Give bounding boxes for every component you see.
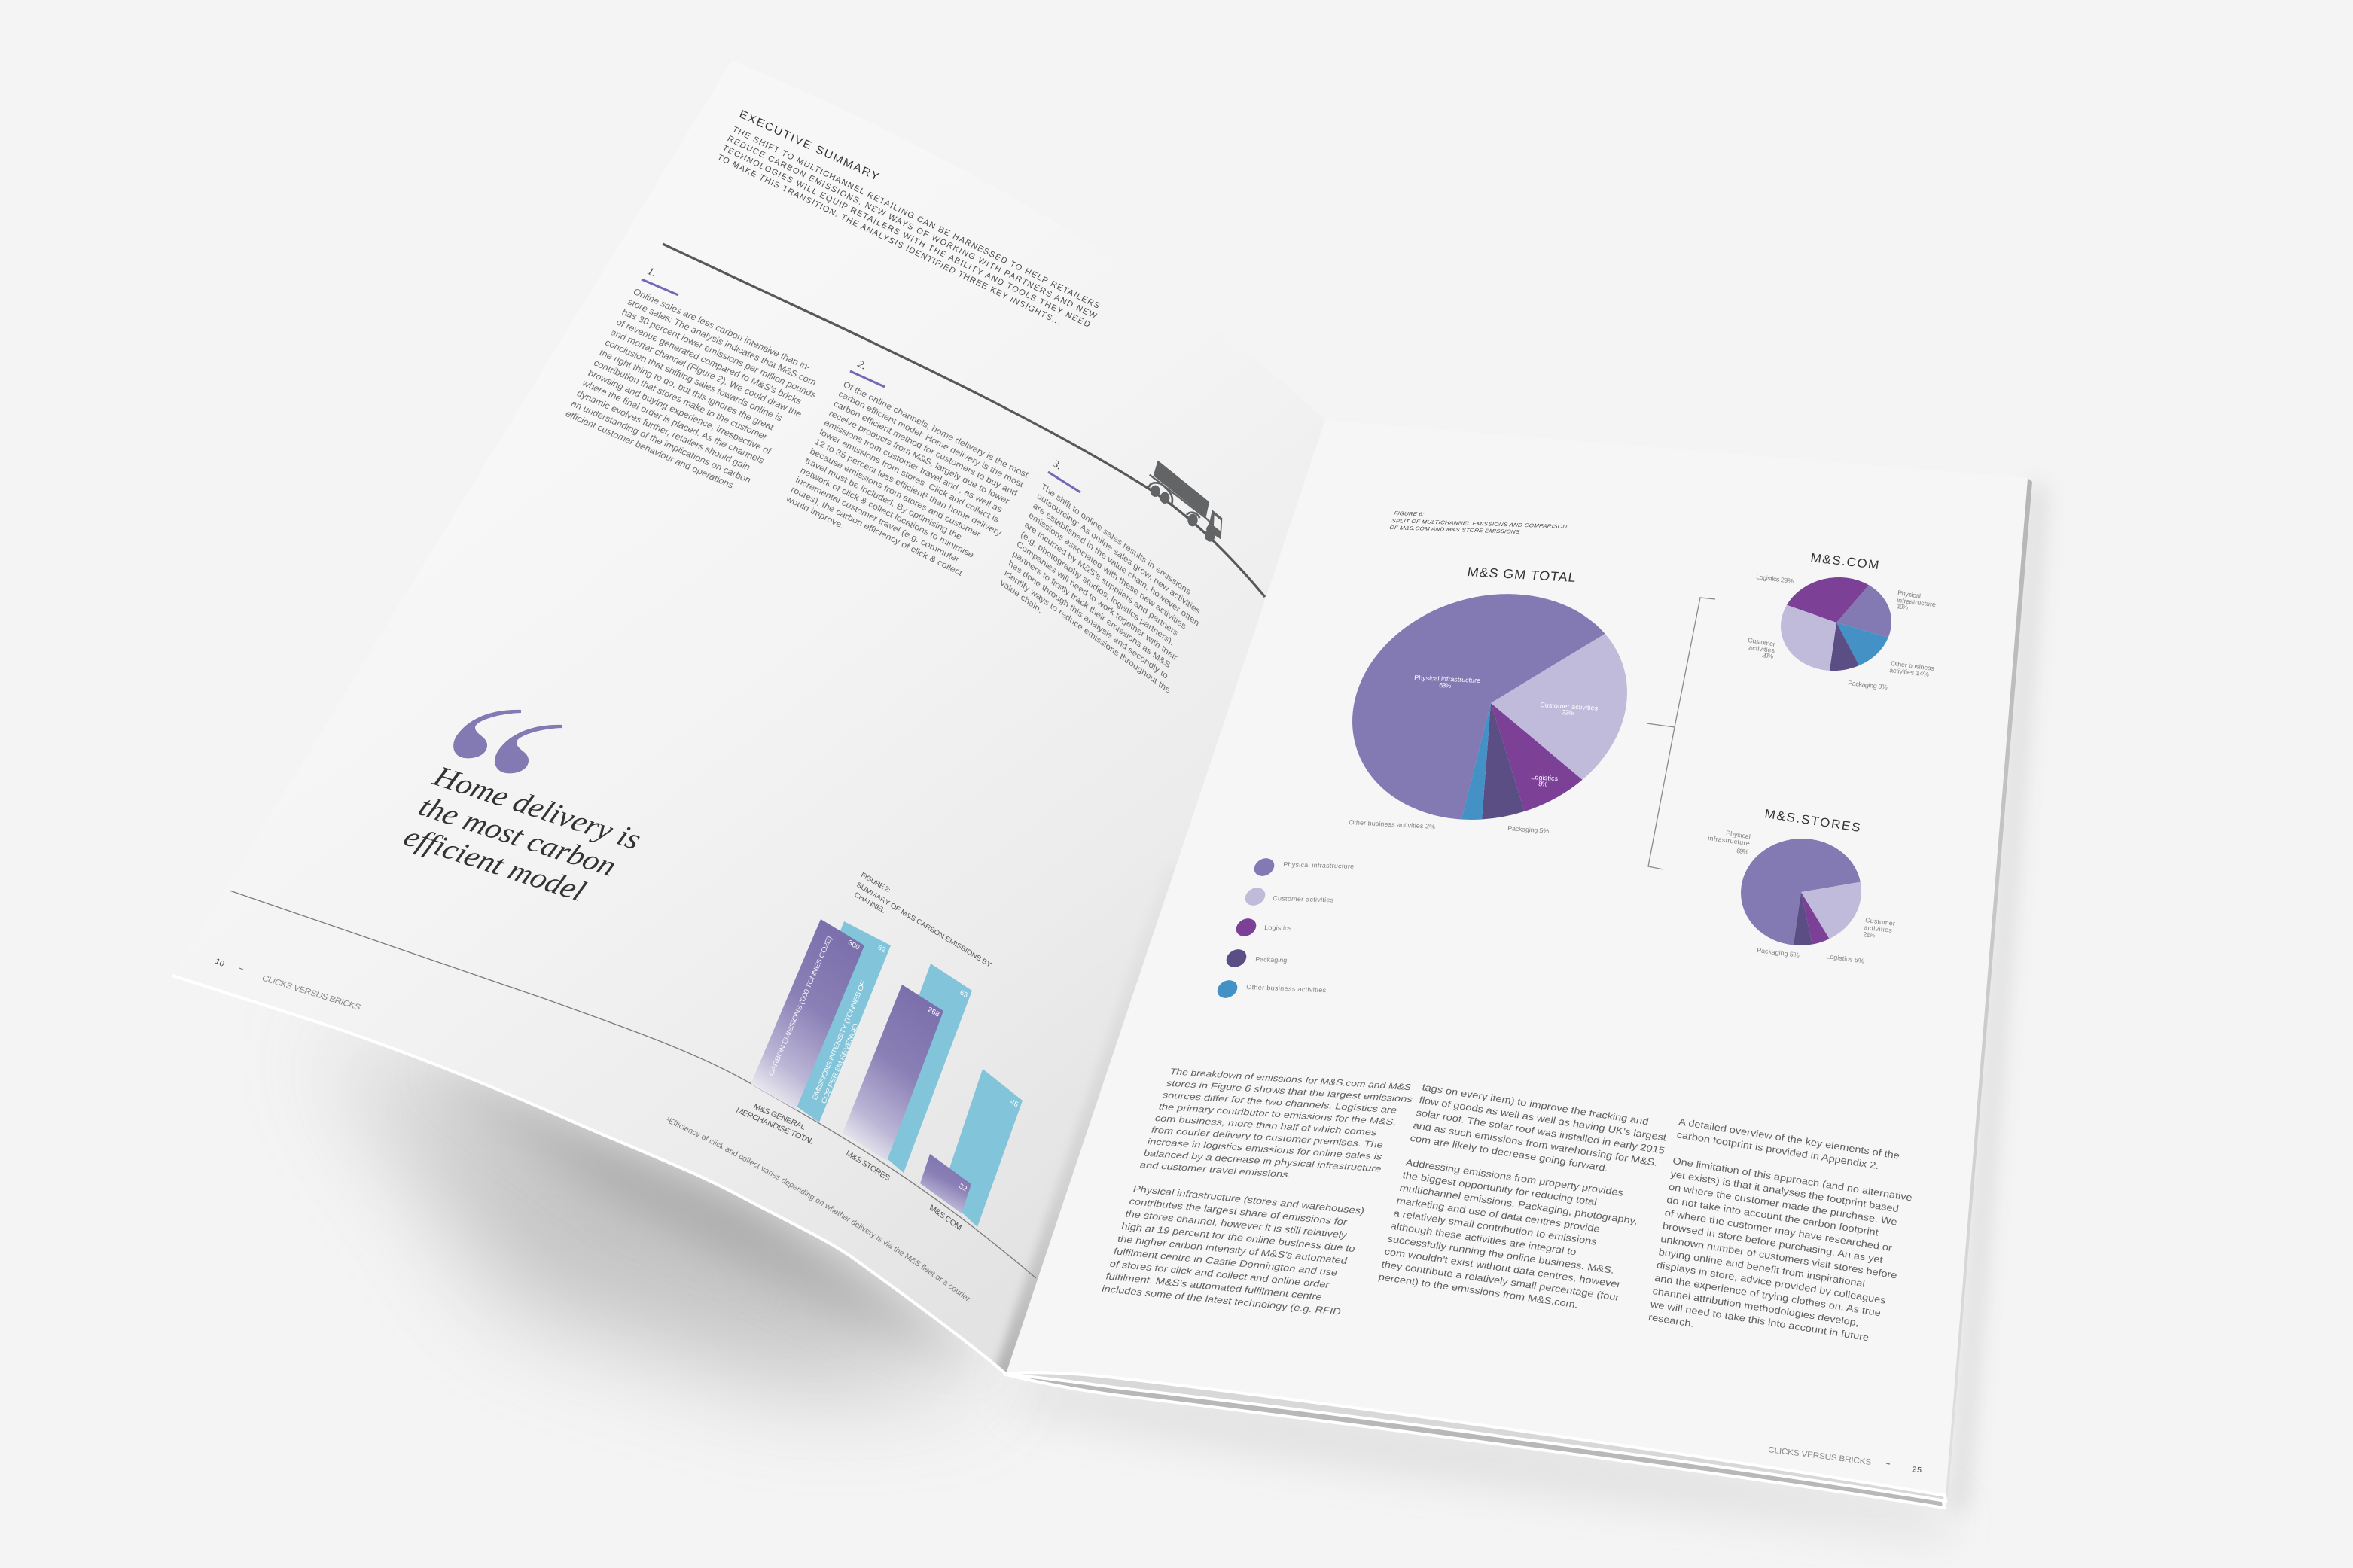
body text column 2 paragraph 1: tags on every item) to improve the tracking and xyxy=(1421,1082,1650,1127)
left footer running title: CLICKS VERSUS BRICKS xyxy=(261,973,362,1012)
pie labels: m&s.stores: Logistics 5% xyxy=(1826,952,1864,965)
body text column 1 paragraph 2: high at 19 percent for the online business due to xyxy=(1120,1221,1357,1254)
pie labels: m&s.stores: activities xyxy=(1864,924,1893,934)
pie chart: m&s.stores xyxy=(1741,838,1861,946)
bracket connector xyxy=(1647,598,1715,869)
pie labels: m&s.com: activities 14% xyxy=(1889,666,1930,678)
insight 2 rule xyxy=(850,371,885,387)
pie labels: m&s.stores xyxy=(1708,829,1895,965)
insight 1 rule xyxy=(642,279,678,295)
pie labels: m&s.com: activities xyxy=(1748,644,1775,654)
insight 1 text: and mortar channel (Figure 2). We could draw the xyxy=(609,327,803,419)
body text column 3: do not take into account the carbon footprint xyxy=(1666,1195,1879,1238)
body text column 3: buying online and benefit from inspirational xyxy=(1658,1247,1866,1289)
insight 2 text: emissions from customer travel and , as well as xyxy=(823,417,1004,514)
legend labels: Customer activities xyxy=(1273,894,1334,903)
bar: stores emissions xyxy=(843,985,943,1161)
bar values: 300 xyxy=(847,939,861,952)
bar axis labels inside bars: EMISSIONS INTENSITY (TONNES OF xyxy=(811,979,867,1101)
road line xyxy=(663,244,1265,597)
left page spine shading xyxy=(994,971,1140,1372)
right page sheet xyxy=(1007,420,2028,1495)
insight 3 text: emissions associated with these new activities xyxy=(1028,510,1187,632)
body text column 3: One limitation of this approach (and no alternative xyxy=(1672,1155,1913,1203)
insight 2 text: carbon efficient method for customers to buy and xyxy=(832,398,1019,498)
bar chart xyxy=(751,919,1023,1227)
body text column 1 paragraph 2: contributes the largest share of emissions for xyxy=(1128,1196,1349,1227)
insight 2 text: 12 to 35 percent less efficient¹ than home delivery xyxy=(813,437,1004,537)
figure 6 caption: OF M&S.COM AND M&S STORE EMISSIONS xyxy=(1389,525,1520,535)
insight 1 text: an understanding of the implications on carbon xyxy=(569,398,753,486)
insight 2 text: Of the online channels, home delivery is the most xyxy=(842,379,1031,480)
left page sheet xyxy=(172,60,1325,1374)
intro text: TECHNOLOGIES WILL EQUIP RETAILERS WITH THE ABILITY AND TOOLS THEY NEED xyxy=(721,144,1092,330)
insight 1 text: has 30 percent lower emissions per million pounds xyxy=(620,307,818,400)
pie labels: m&s.com: 19% xyxy=(1897,602,1909,611)
bar axis labels inside bars: CARBON EMISSIONS ('000 TONNES CO2E) xyxy=(767,935,834,1077)
pie outer labels: gm total: Other business activities 2% xyxy=(1349,818,1436,830)
body text column 2 paragraph 2: they contribute a relatively small percentage (four xyxy=(1380,1259,1620,1303)
body text column 2 paragraph 1 xyxy=(1409,1082,1672,1181)
insight 2 text xyxy=(784,379,1032,595)
insight 3 text xyxy=(999,481,1209,705)
bar values: 32 xyxy=(958,1182,968,1193)
insight 1 text xyxy=(563,286,829,501)
body text column 3: we will need to take this into account in future xyxy=(1649,1299,1870,1343)
insight 3 text: are established in the value chain, however often xyxy=(1032,501,1200,629)
body text column 1 paragraph 1 xyxy=(1138,1067,1418,1186)
body text column 1 paragraph 2: the higher carbon intensity of M&S's automated xyxy=(1116,1234,1349,1266)
bar: m&s.com intensity xyxy=(941,1069,1023,1227)
pie labels: m&s.com: Logistics 29% xyxy=(1756,573,1794,585)
insight 2 text: would improve. xyxy=(784,493,846,531)
pie labels: m&s.stores: 21% xyxy=(1863,930,1876,939)
legend xyxy=(1214,854,1355,1002)
body text column 1 paragraph 2: fulfilment. M&S's automated fulfilment centre xyxy=(1105,1271,1324,1302)
pie labels: m&s.stores: infrastructure xyxy=(1708,834,1750,847)
body text column 3 xyxy=(1647,1116,1919,1359)
pie labels: gm total: Physical infrastructure xyxy=(1414,674,1481,684)
insight 2 text: receive products from M&S, largely due to lower xyxy=(828,408,1011,506)
bar values xyxy=(847,939,1020,1193)
pie labels: gm total: Logistics xyxy=(1531,773,1559,782)
body text column 2 paragraph 2 xyxy=(1377,1157,1645,1315)
legend labels: Physical infrastructure xyxy=(1283,860,1355,870)
left page bottom highlight xyxy=(172,976,1006,1374)
insight 1 text: efficient customer behaviour and operations. xyxy=(564,409,738,492)
body text column 2 paragraph 2: successfully running the online business. M&S. xyxy=(1386,1234,1616,1276)
body text column 3: yet exists) is that it analyses the footprint based xyxy=(1670,1168,1900,1214)
insight 3 number: 3. xyxy=(1051,457,1063,473)
shadow under right page xyxy=(1009,482,2047,1532)
bar: general merchandise intensity xyxy=(776,921,891,1122)
pie chart: m&s.com xyxy=(1781,575,1891,673)
body text column 3: research. xyxy=(1647,1311,1695,1329)
pie chart: m&s gm total xyxy=(1352,580,1627,833)
insight 1 text: browsing and buying experience, irrespective of xyxy=(587,368,773,456)
insight 2 text: travel must be included. By optimising the xyxy=(803,455,964,542)
insight 1 number: 1. xyxy=(645,265,658,279)
insight 3 text: (e.g. photography studios, logistics partners). xyxy=(1020,529,1175,647)
body text column 2 paragraph 2: multichannel emissions. Packaging, photography, xyxy=(1398,1183,1639,1226)
legend: physical infrastructure xyxy=(1251,854,1278,880)
legend labels: Packaging xyxy=(1255,955,1288,964)
right page bottom highlight xyxy=(1007,1372,1946,1496)
pie labels: m&s.com: infrastructure xyxy=(1897,596,1937,608)
bar values: 65 xyxy=(959,988,969,1000)
pie labels: gm total: Customer activities xyxy=(1540,701,1599,712)
body text column 1 paragraph 2 xyxy=(1101,1183,1374,1317)
bar values: 268 xyxy=(927,1006,940,1019)
insight 3 text: has done through this analysis and secondly to xyxy=(1007,559,1169,681)
insight 1 text: Online sales are less carbon intensive than in- xyxy=(632,287,812,373)
figure 6 caption: SPLIT OF MULTICHANNEL EMISSIONS AND COMPARISON xyxy=(1391,518,1568,530)
legend: customer activities xyxy=(1242,884,1269,909)
pie labels: m&s.com: Customer xyxy=(1748,636,1775,648)
insight 1 text: contribution that stores make to the customer xyxy=(592,358,770,442)
body text column 2 paragraph 2: although these activities are integral to xyxy=(1389,1221,1577,1257)
pull quote: efficient model xyxy=(399,820,591,907)
insight 3 text: The shift to online sales results in emissions xyxy=(1040,481,1192,597)
body text column 3: on where the customer made the purchase. We xyxy=(1668,1181,1898,1228)
body text column 3: unknown number of customers visit stores before xyxy=(1660,1234,1898,1280)
baseline rule xyxy=(230,891,1036,1278)
pie labels: m&s.stores: 69% xyxy=(1736,847,1749,856)
figure 2 caption: SUMMARY OF M&S CARBON EMISSIONS BY xyxy=(855,881,993,970)
pie labels: gm total: 63% xyxy=(1439,681,1452,690)
bar: general merchandise emissions xyxy=(751,919,864,1110)
body text column 1 paragraph 2: fulfilment centre in Castle Donnington and use xyxy=(1112,1246,1339,1278)
pie labels: gm total xyxy=(1414,674,1599,788)
pull quote: the most carbon xyxy=(413,790,622,882)
shadow under left page xyxy=(324,1031,994,1385)
panel: right page content xyxy=(1101,510,1937,1475)
chart category labels: MERCHANDISE TOTAL xyxy=(735,1106,815,1146)
body text column 2 paragraph 2: the biggest opportunity for reducing total xyxy=(1401,1170,1598,1207)
bar axis labels inside bars xyxy=(767,935,867,1105)
body text column 1 paragraph 1: stores in Figure 6 shows that the largest emissions xyxy=(1165,1078,1414,1104)
insight 3 text: partners to firstly track their emissions as M&S xyxy=(1011,549,1172,670)
insight 2 text: carbon efficient model: Home delivery is the most xyxy=(837,388,1026,489)
right footer dash xyxy=(1886,1463,1890,1464)
pie labels: m&s.com: Packaging 9% xyxy=(1848,679,1888,691)
intro text: THE SHIFT TO MULTICHANNEL RETAILING CAN BE HARNESSED TO HELP RETAILERS xyxy=(731,125,1101,311)
intro text: REDUCE CARBON EMISSIONS. NEW WAYS OF WORKING WITH PARTNERS AND NEW xyxy=(726,134,1099,321)
body text column 2 paragraph 2: marketing and use of data centres provide xyxy=(1395,1195,1601,1235)
pie labels: gm total: 8% xyxy=(1538,780,1548,788)
heading: m&s.stores: M&S.STORES xyxy=(1763,806,1861,835)
right footer running title: CLICKS VERSUS BRICKS xyxy=(1768,1445,1872,1467)
body text column 2 paragraph 2: com wouldn't exist without data centres, however xyxy=(1383,1246,1622,1289)
body text column 3: browsed in store before purchasing. An as yet xyxy=(1662,1220,1884,1265)
pie outer labels: gm total: Packaging 5% xyxy=(1507,824,1550,835)
body text column 2 paragraph 2: Addressing emissions from property provides xyxy=(1404,1157,1625,1198)
insight 3 text: identify ways to reduce emissions throughout the xyxy=(1003,568,1172,696)
body text column 1 paragraph 2: of stores for click and collect and online order xyxy=(1108,1259,1331,1290)
left footer dash xyxy=(239,968,243,970)
body text column 2 paragraph 1: and as such emissions from warehousing for M&S. xyxy=(1412,1120,1659,1168)
pie outer labels: gm total xyxy=(1349,818,1550,835)
right page edge thickness xyxy=(1946,478,2032,1498)
body text column 2 paragraph 2: a relatively small contribution to emissions xyxy=(1392,1208,1598,1247)
body text column 1 paragraph 1: increase in logistics emissions for online sales is xyxy=(1146,1137,1384,1162)
pie labels: gm total: 22% xyxy=(1562,708,1574,717)
pie labels: m&s.com: Other business xyxy=(1891,659,1935,672)
footnote: ¹Efficiency of click and collect varies depending on whether delivery is via the M&S fleet or a courier. xyxy=(667,1117,970,1302)
insight 3 text: Companies will need to work together with their xyxy=(1016,539,1178,662)
body text column 3: displays in store, advice provided by colleagues xyxy=(1656,1259,1887,1306)
bar: m&s.com emissions xyxy=(920,1154,971,1213)
body text column 1 paragraph 1: balanced by a decrease in physical infrastructure xyxy=(1142,1148,1383,1174)
legend labels xyxy=(1246,860,1355,994)
body text column 1 paragraph 1: sources differ for the two channels. Logistics are xyxy=(1161,1090,1398,1115)
insight 1 text: where the final order is placed. As the channels xyxy=(580,378,766,466)
chart category labels: M&S STORES xyxy=(845,1149,892,1183)
body text column 3: and the experience of trying clothes on. As true xyxy=(1654,1273,1882,1318)
insight 1 text: store sales: The analysis indicates that M&S.com xyxy=(626,297,818,388)
pie labels: m&s.com: 29% xyxy=(1762,651,1774,660)
bar axis labels inside bars: CO2 PER £M REVENUE) xyxy=(820,1022,861,1105)
insight 1 text: of revenue generated compared to M&S's bricks xyxy=(614,317,803,406)
insight 1 text: dynamic evolves further, retailers should gain xyxy=(575,388,752,473)
figure 6 caption: FIGURE 6: xyxy=(1394,510,1425,517)
pull quote: Home delivery is xyxy=(428,760,647,855)
body text column 1 paragraph 1: and customer travel emissions. xyxy=(1138,1160,1293,1180)
body text column 1 paragraph 2: includes some of the latest technology (e.g. RFID xyxy=(1101,1283,1343,1317)
intro text: TO MAKE THIS TRANSITION. THE ANALYSIS IDENTIFIED THREE KEY INSIGHTS... xyxy=(715,153,1062,327)
heading: executive summary: EXECUTIVE SUMMARY xyxy=(738,108,881,184)
insight 1 text: the right thing to do, but this ignores the great xyxy=(598,348,776,432)
bar: stores intensity xyxy=(866,964,972,1173)
icon: truck xyxy=(1149,461,1222,542)
heading: m&s gm total: M&S GM TOTAL xyxy=(1466,565,1577,585)
figure 2 caption: CHANNEL xyxy=(853,891,886,915)
pie labels: m&s.com xyxy=(1748,573,1937,691)
body text column 1 paragraph 2: Physical infrastructure (stores and warehouses) xyxy=(1132,1183,1366,1216)
body text column 2 paragraph 1: solar roof. The solar roof was installed in early 2015 xyxy=(1415,1107,1666,1156)
legend: other business activities xyxy=(1214,976,1241,1002)
body text column 1 paragraph 1: from courier delivery to customer premises. The xyxy=(1150,1125,1385,1149)
pie labels: m&s.stores: Customer xyxy=(1865,916,1895,927)
legend labels: Logistics xyxy=(1264,924,1292,932)
icon: quotation marks xyxy=(453,710,562,773)
legend labels: Other business activities xyxy=(1246,983,1327,994)
insight 1 text: conclusion that shifting sales towards online is xyxy=(603,337,785,423)
insight 3 text: are incurred by M&S's suppliers and partners xyxy=(1023,520,1179,638)
body text column 1 paragraph 1: com business, more than half of which comes xyxy=(1154,1113,1379,1137)
body text column 3: of where the customer may have researched or xyxy=(1664,1207,1893,1253)
heading: m&s.com: M&S.COM xyxy=(1809,550,1880,572)
body text column 2 paragraph 1: flow of goods as well as well as having UK's largest xyxy=(1418,1095,1668,1143)
chart category labels: M&S.COM xyxy=(928,1203,963,1233)
body text column 1 paragraph 1: The breakdown of emissions for M&S.com and M&S xyxy=(1169,1067,1413,1092)
insight 2 text: lower emissions from stores. Click and collect is xyxy=(818,427,1001,525)
body text column 2 paragraph 2: percent) to the emissions from M&S.com. xyxy=(1377,1271,1579,1310)
pie labels: m&s.stores: Physical xyxy=(1726,829,1751,841)
figure 6 caption xyxy=(1389,510,1568,535)
legend: logistics xyxy=(1233,915,1260,940)
insight 3 text: value chain. xyxy=(999,577,1044,616)
insight 2 number: 2. xyxy=(855,358,868,372)
body text column 3: A detailed overview of the key elements of the xyxy=(1678,1116,1900,1162)
chart category labels xyxy=(735,1102,963,1233)
pie labels: m&s.com: Physical xyxy=(1897,589,1921,600)
insight 2 text: network of click & collect locations to minimise xyxy=(799,465,976,560)
pull quote xyxy=(398,760,647,915)
page stack: lower sheets xyxy=(1006,1355,1946,1508)
insight 3 rule xyxy=(1048,472,1080,492)
legend: packaging xyxy=(1223,945,1250,971)
insight 3 text: outsourcing: As online sales grow, new activities xyxy=(1036,491,1202,617)
body text column 2 paragraph 1: com are likely to decrease going forward. xyxy=(1409,1133,1609,1174)
right footer page number: 25 xyxy=(1912,1466,1922,1475)
insight 2 text: incremental customer travel (e.g. commuter xyxy=(794,474,961,565)
body text column 3: carbon footprint is provided in Appendix 2. xyxy=(1676,1129,1879,1171)
insight 2 text: because emissions from stores and customer xyxy=(809,446,983,539)
body text column 1 paragraph 2: the stores channel, however it is still relatively xyxy=(1124,1209,1349,1241)
body text column 3: channel attribution methodologies develop, xyxy=(1652,1286,1860,1328)
bar values: 45 xyxy=(1009,1098,1020,1109)
insight 2 text: routes), the carbon efficiency of click & collect xyxy=(789,484,965,578)
chart category labels: M&S GENERAL xyxy=(752,1102,807,1132)
bar values: 62 xyxy=(876,943,887,955)
figure 2 caption: FIGURE 2: xyxy=(860,871,892,895)
pie labels: m&s.stores: Packaging 5% xyxy=(1757,946,1800,959)
left footer page number: 10 xyxy=(214,957,226,969)
body text column 1 paragraph 1: the primary contributor to emissions for the M&S. xyxy=(1157,1101,1398,1127)
panel: left page content xyxy=(214,108,1266,1302)
